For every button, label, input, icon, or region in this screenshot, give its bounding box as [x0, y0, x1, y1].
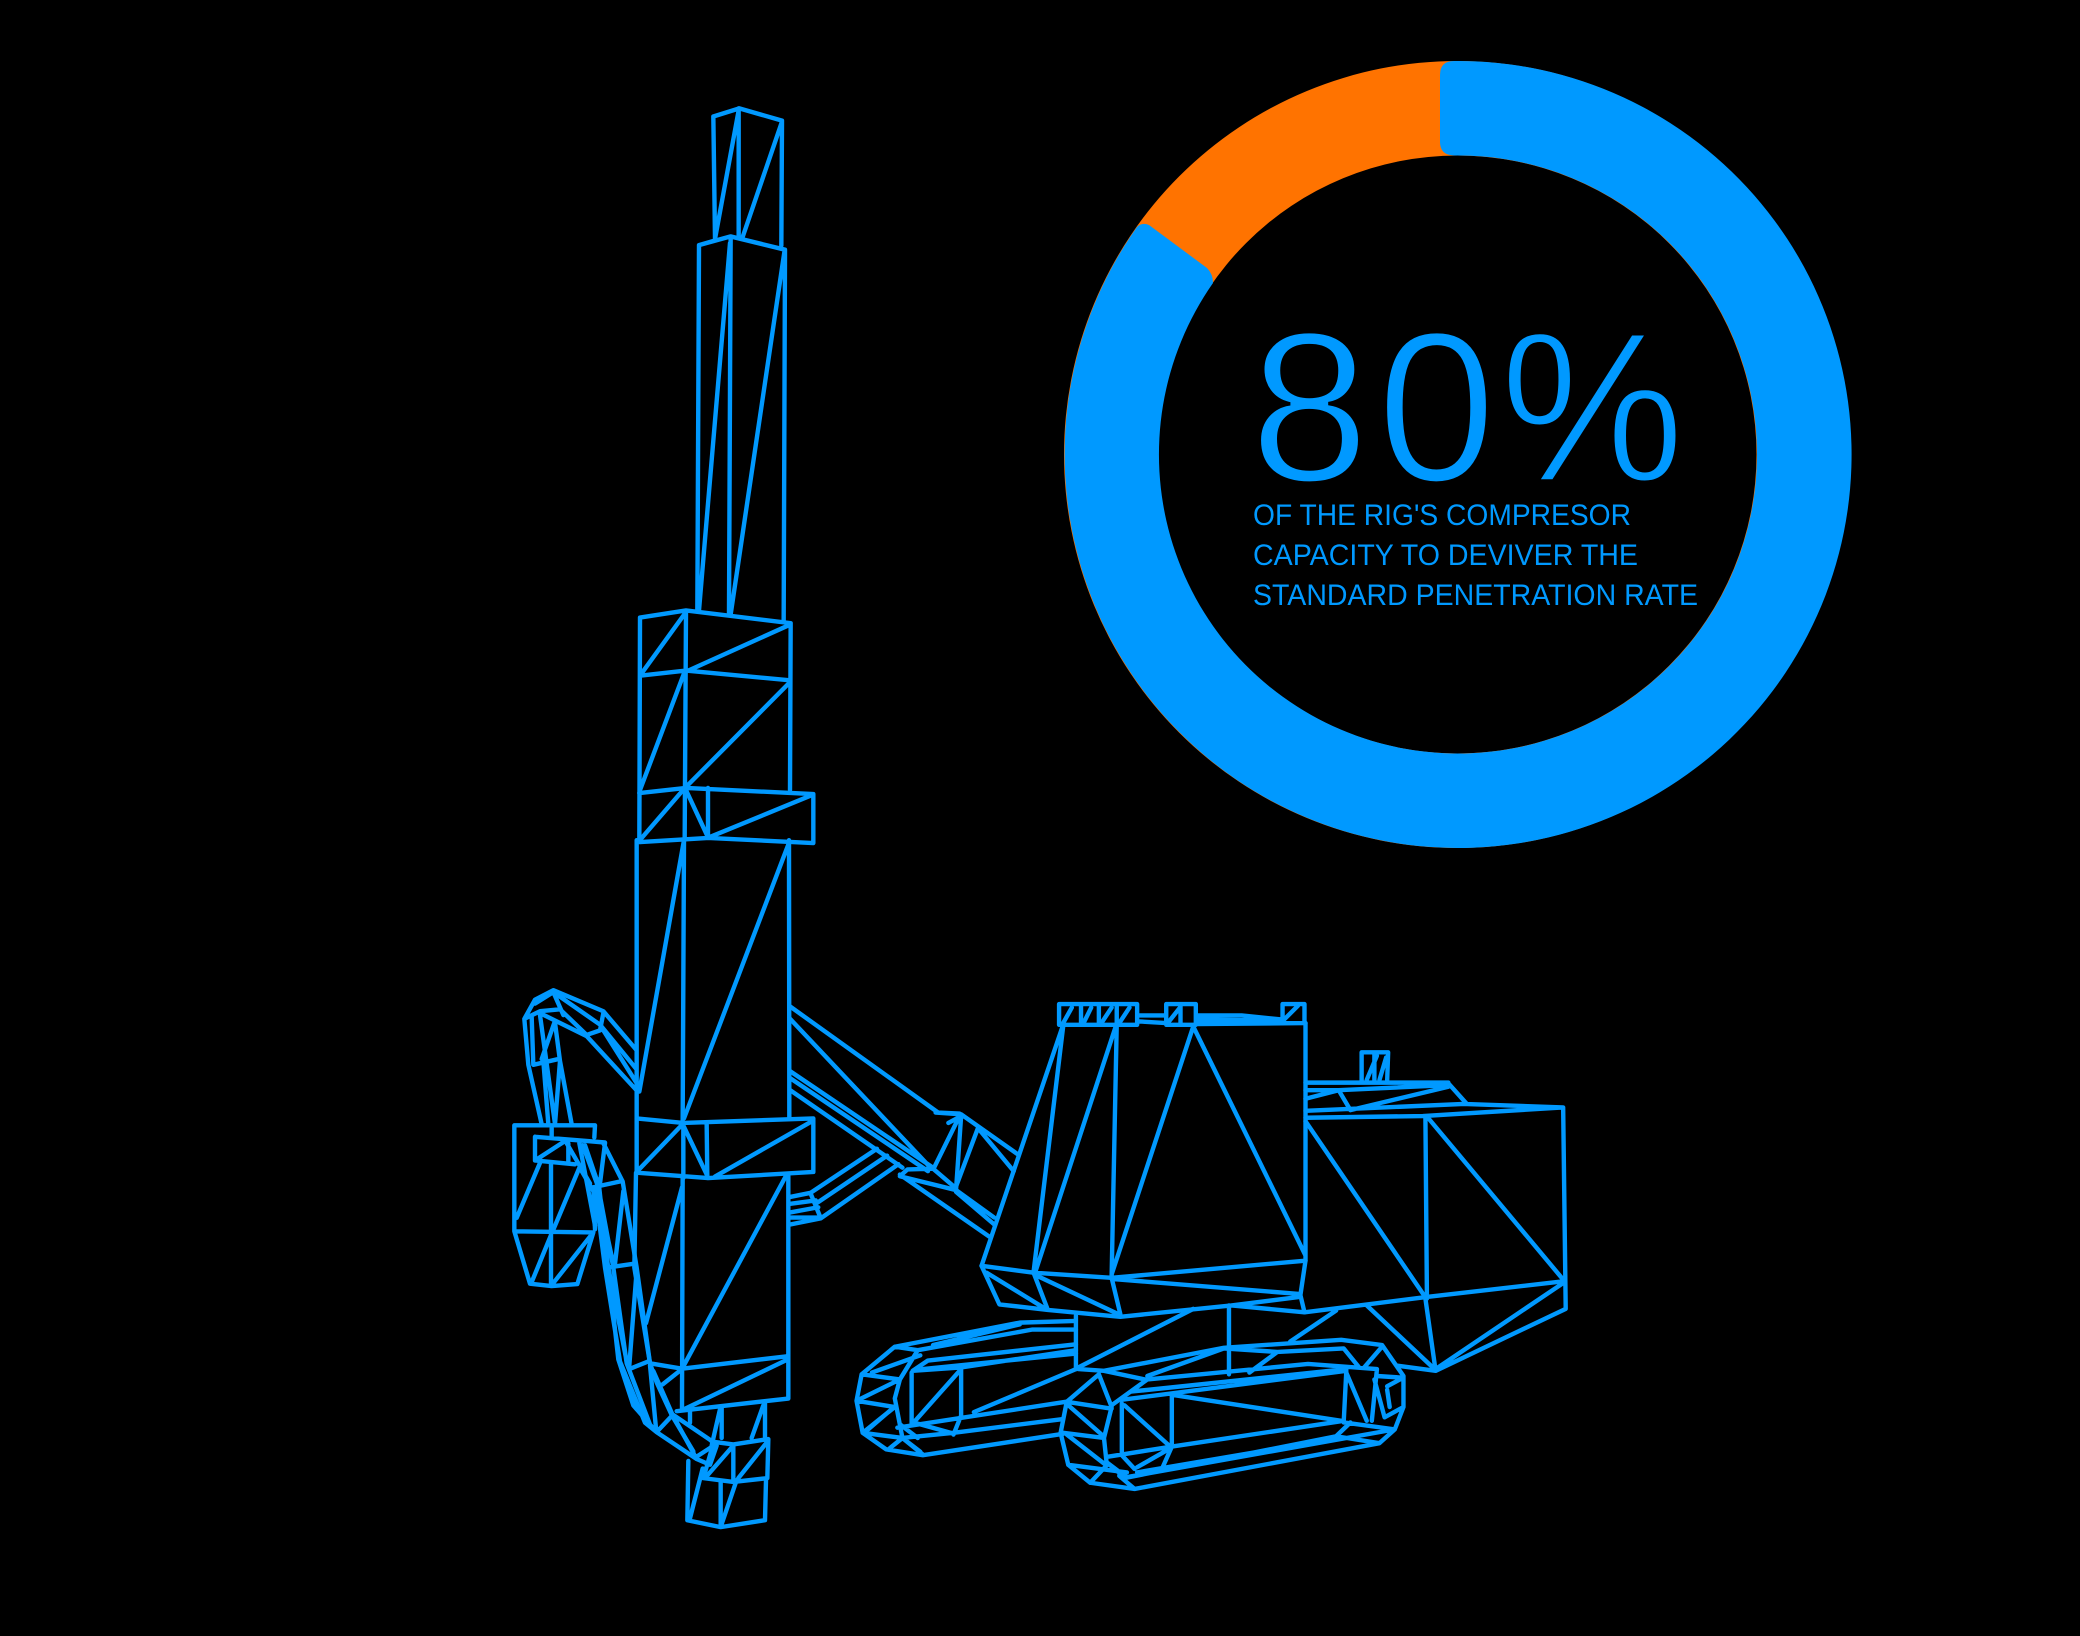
big number: 80%: 8: [1250, 288, 1369, 527]
cab top boxes: [1059, 1004, 1306, 1025]
caption text: STANDARD PENETRATION RATE: [1253, 579, 1698, 612]
big number: 80%: 0: [1377, 288, 1496, 527]
engine housing: [1290, 1083, 1566, 1371]
rig mast lower column, drill head and hoses: [514, 840, 813, 1527]
caption text: CAPACITY TO DEVIVER THE: [1253, 539, 1638, 572]
right track: [1061, 1340, 1403, 1489]
donut chart: [1064, 61, 1852, 848]
big number: 80%: [1250, 287, 1685, 527]
donut segment: orange remainder: [1064, 61, 1851, 848]
left track: [857, 1321, 1076, 1455]
wireframe drilling rig: [514, 108, 1566, 1527]
pedestal: [1076, 1305, 1229, 1374]
caption text: OF THE RIG'S COMPRESOR: [1253, 499, 1631, 532]
exhaust: [1362, 1052, 1388, 1082]
donut segment: blue 80 percent: [1065, 61, 1852, 848]
rig boom, cab, engine and tracks: [789, 1004, 1566, 1489]
boom connector: [789, 1006, 1017, 1237]
big number: 80%: %: [1500, 287, 1685, 527]
rig mast top sections: [639, 108, 813, 843]
caption text: [1253, 499, 1698, 612]
cab body: [982, 1023, 1306, 1278]
